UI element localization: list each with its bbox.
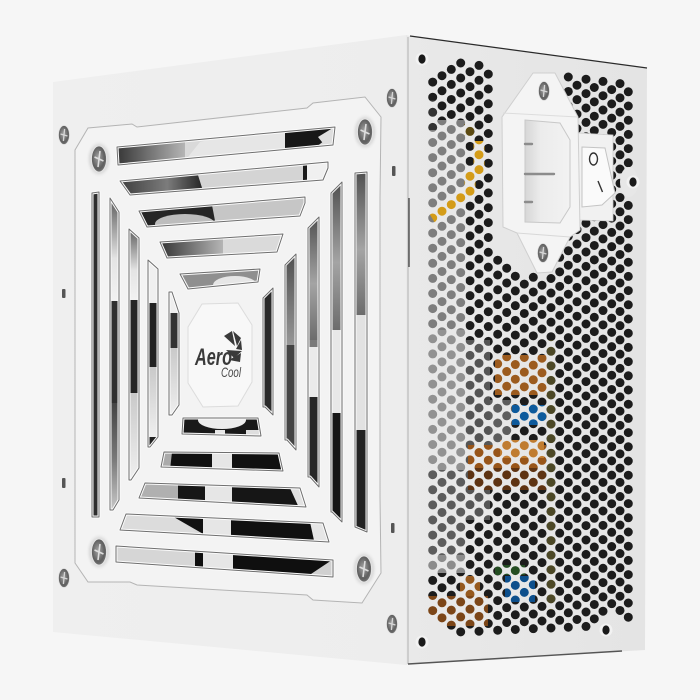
switch base (578, 133, 613, 221)
vertical slots left (94, 194, 98, 516)
logo text: Aero: Aero (194, 344, 232, 371)
power inlet socket (502, 73, 580, 273)
panel: perforated rear side (406, 35, 647, 665)
socket pins (525, 144, 554, 202)
rocker (582, 147, 615, 207)
raised fan frame plate (75, 97, 381, 603)
icon: logo mark (224, 331, 242, 362)
socket screws (538, 82, 550, 100)
mesh corner holes (416, 52, 640, 648)
power switch (578, 133, 615, 221)
socket housing (502, 73, 580, 273)
grille slot bevel edges (92, 127, 367, 577)
logo badge (188, 303, 252, 407)
bottom slots (184, 420, 258, 434)
vertical slots right (264, 292, 272, 412)
logo text: Cool: Cool (221, 364, 242, 380)
product illustration: white power supply (58, 35, 648, 665)
screws on the fan side (58, 88, 398, 634)
icon: off symbol (590, 153, 598, 165)
socket recess (525, 120, 570, 223)
top slots (118, 142, 185, 160)
small side notches (62, 166, 396, 533)
icon: on symbol (598, 181, 602, 192)
honeycomb perforation showing internal components (420, 55, 640, 645)
fan seen through the grille slots (94, 128, 366, 576)
panel: fan side of the case (53, 35, 406, 665)
